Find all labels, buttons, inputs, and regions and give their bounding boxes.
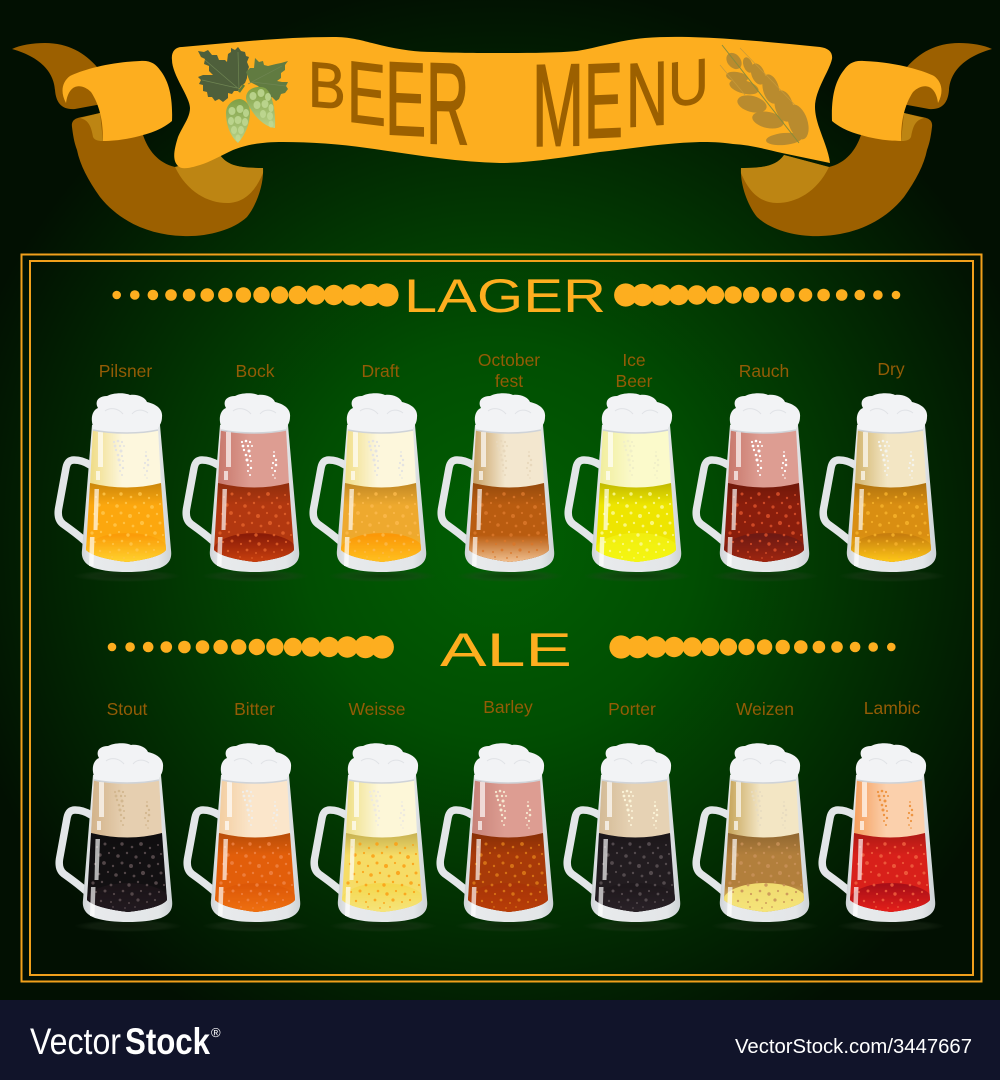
mug: Barley bbox=[440, 743, 563, 932]
mug: Draft bbox=[313, 393, 436, 582]
double frame bbox=[22, 254, 982, 982]
mug: Dry bbox=[823, 393, 946, 582]
beer labels: lager row: Dry bbox=[877, 359, 905, 379]
mug: Stout bbox=[59, 743, 182, 932]
footer logo: Stock bbox=[125, 1021, 210, 1062]
ribbon: main banner bbox=[172, 37, 832, 168]
mug: Pilsner bbox=[58, 393, 181, 582]
beer labels: lager row: Draft bbox=[362, 361, 400, 381]
ribbon: right tail and curl bbox=[741, 43, 992, 236]
heading: LAGER: LAGER bbox=[404, 269, 606, 322]
beer labels: lager row: fest bbox=[495, 371, 523, 391]
beer labels: ale row: Weisse bbox=[348, 699, 406, 719]
footer logo: Vector bbox=[30, 1021, 121, 1062]
heading: ALE: ALE bbox=[440, 623, 572, 676]
beer labels: lager row: October bbox=[478, 350, 540, 370]
beer labels: ale row: Weizen bbox=[736, 699, 794, 719]
heading dots: lager left bbox=[112, 283, 399, 307]
beer labels: lager row: Pilsner bbox=[99, 361, 152, 381]
banner title: BEER: E bbox=[347, 42, 386, 145]
beer labels: ale row: Barley bbox=[483, 697, 533, 717]
beer labels: lager row: Bock bbox=[236, 361, 275, 381]
ribbon: left tail and curl bbox=[12, 43, 263, 236]
beer labels: lager row: Beer bbox=[616, 371, 653, 391]
banner title: MENU: U bbox=[668, 45, 709, 121]
banner title: BEER bbox=[308, 39, 469, 169]
beer labels: ale row: Lambic bbox=[864, 698, 920, 718]
beer labels: ale row bbox=[107, 697, 920, 719]
banner title: BEER: R bbox=[426, 39, 469, 169]
banner title: BEER: E bbox=[385, 40, 426, 159]
footer image id: VectorStock.com/3447667 bbox=[735, 1036, 972, 1058]
icon: wheat ear bbox=[720, 45, 813, 147]
banner title: MENU bbox=[532, 39, 709, 171]
footer logo bbox=[30, 1021, 221, 1062]
mug: Rauch bbox=[696, 393, 819, 582]
banner title: MENU: N bbox=[626, 43, 668, 147]
beer labels: lager row: Rauch bbox=[739, 361, 789, 381]
mug: Bitter bbox=[187, 743, 310, 932]
heading dots: ale left bbox=[108, 635, 394, 659]
banner title: BEER: B bbox=[308, 48, 346, 123]
footer logo: ® bbox=[211, 1025, 221, 1040]
footer bar bbox=[0, 1000, 1000, 1080]
mug: Bock bbox=[186, 393, 309, 582]
banner title: MENU: E bbox=[584, 41, 623, 162]
beer labels: ale row: Stout bbox=[107, 699, 148, 719]
mug: October fest bbox=[441, 393, 564, 582]
beer labels: lager row: Ice bbox=[622, 350, 646, 370]
mug: Ice Beer bbox=[568, 393, 691, 582]
banner title: MENU: M bbox=[532, 39, 584, 171]
mug: Porter bbox=[567, 743, 690, 932]
mug: Weizen bbox=[696, 743, 819, 932]
beer labels: ale row: Bitter bbox=[234, 699, 275, 719]
beer labels: ale row: Porter bbox=[608, 699, 656, 719]
icon: hop leaves and cones bbox=[198, 47, 288, 143]
beer labels: lager row bbox=[99, 350, 905, 391]
mug: Lambic bbox=[822, 743, 945, 932]
heading dots: ale right bbox=[609, 635, 896, 659]
heading dots: lager right bbox=[614, 283, 900, 307]
mug: Weisse bbox=[314, 743, 437, 932]
